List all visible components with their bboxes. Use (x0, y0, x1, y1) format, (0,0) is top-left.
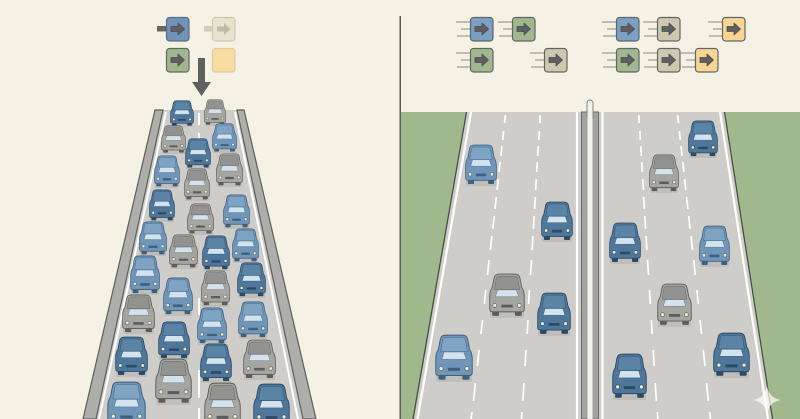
car (123, 295, 154, 334)
car (188, 204, 213, 235)
orange moving icon (708, 18, 745, 41)
traffic jam cars (108, 100, 289, 419)
beige moving icon (643, 18, 680, 41)
grass verge (401, 112, 800, 419)
car (140, 222, 166, 256)
road edge lines (413, 112, 772, 419)
car (613, 354, 646, 400)
car (201, 344, 231, 383)
beige moving icon (530, 48, 567, 72)
car (700, 226, 729, 267)
car (170, 101, 194, 127)
lane flow diagram (456, 18, 745, 72)
left guard rail (83, 110, 163, 419)
car (170, 235, 197, 269)
car (204, 100, 226, 126)
car (131, 256, 159, 295)
panel: congested road (83, 18, 316, 419)
car (239, 302, 267, 339)
car (238, 263, 265, 298)
lane merge diagram (157, 18, 235, 96)
car (466, 145, 496, 186)
car (202, 271, 229, 307)
car (185, 169, 209, 201)
car (658, 284, 691, 327)
car (490, 274, 524, 318)
blue lane icon with stub (157, 18, 189, 41)
free-flowing cars (436, 121, 749, 400)
right guard rail (237, 110, 316, 419)
blue moving icon (456, 18, 493, 41)
car (108, 382, 145, 419)
green moving icon (602, 48, 639, 72)
faded lane icon with stub (204, 18, 235, 41)
lane dashes (471, 115, 710, 419)
closed lane icon (212, 48, 235, 72)
beige moving icon (643, 48, 680, 72)
central median barrier (577, 100, 602, 419)
car (714, 333, 749, 378)
car (610, 223, 640, 264)
car (650, 155, 678, 193)
orange moving icon (681, 48, 718, 72)
car (203, 236, 229, 271)
congested road surface (96, 110, 303, 419)
road edge lines (99, 112, 298, 419)
icon: corner sparkle (753, 386, 781, 414)
car (244, 340, 275, 380)
car (164, 278, 192, 316)
highway surface (414, 112, 772, 419)
green lane icon (166, 48, 189, 72)
car (436, 335, 472, 382)
car (162, 126, 186, 154)
car (233, 229, 258, 263)
car (186, 139, 210, 169)
centre lane dashes (198, 113, 200, 419)
merge arrow (192, 58, 211, 96)
car (217, 154, 242, 187)
car (542, 202, 572, 242)
car (224, 195, 249, 229)
panel divider line (400, 16, 401, 419)
car (159, 322, 189, 360)
car (538, 293, 570, 336)
car (155, 156, 179, 188)
green moving icon (456, 48, 493, 72)
car (150, 190, 174, 222)
car (156, 359, 191, 405)
car (116, 337, 147, 377)
car (198, 308, 226, 345)
car (254, 384, 289, 419)
blue moving icon (602, 18, 639, 41)
car (689, 121, 717, 158)
car (205, 383, 240, 419)
car (212, 124, 236, 153)
green moving icon (498, 18, 535, 41)
panel: free-flowing road (400, 16, 800, 419)
